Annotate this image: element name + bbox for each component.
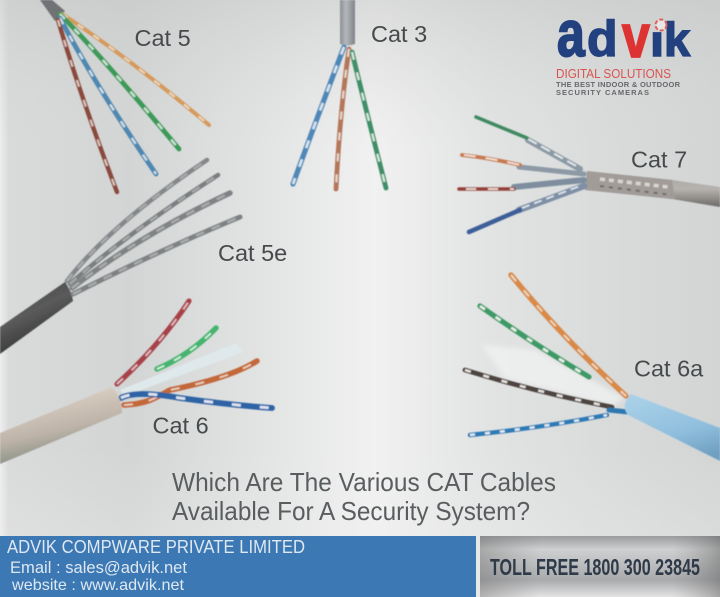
- Cat 3 green pair: [352, 52, 386, 188]
- label: Cat 6: Cat 6: [152, 412, 209, 438]
- cable: Cat 3: [293, 0, 386, 189]
- Cat 5 green pair: [60, 14, 179, 149]
- label: Cat 7: Cat 7: [631, 146, 687, 172]
- company name: ADVIK COMPWARE PRIVATE LIMITED: [7, 537, 305, 557]
- Cat 5e wire 3: [72, 193, 230, 288]
- panel: toll free: [480, 536, 720, 597]
- Cat 6a orange pair: [511, 275, 626, 396]
- Cat 3 orange pair: [336, 49, 349, 189]
- Cat 7 green pair: [476, 117, 580, 169]
- cable: Cat 5e: [0, 160, 240, 354]
- Cat 5e jacket: [0, 282, 73, 354]
- Cat 6 orange pair: [124, 361, 257, 405]
- title line 1: Which Are The Various CAT Cables: [172, 467, 556, 497]
- Cat 5 blue pair: [60, 18, 156, 174]
- logo wordmark: a: [557, 0, 585, 71]
- email: Email : sales@advik.net: [10, 558, 187, 577]
- logo wordmark: k: [664, 13, 691, 66]
- logo wordmark: [557, 0, 691, 71]
- Cat 6a green pair: [480, 306, 589, 377]
- Cat 6 green pair: [157, 328, 216, 369]
- Cat 5e wire 4: [73, 217, 240, 294]
- Cat 3 blue pair: [293, 47, 344, 184]
- label: Cat 5: Cat 5: [134, 25, 191, 51]
- logo tagline: THE BEST INDOOR & OUTDOOR: [556, 80, 681, 89]
- label: Cat 3: Cat 3: [371, 21, 427, 47]
- Cat 5e wire 2: [70, 175, 218, 284]
- Cat 6 separator film: [120, 343, 244, 396]
- cable: Cat 5: [40, 0, 209, 192]
- Cat 7 orange pair: [462, 155, 584, 174]
- Cat 6 jacket: [0, 387, 122, 464]
- cable: Cat 6a: [465, 275, 720, 461]
- Cat 6 blue pair: [121, 394, 272, 408]
- logo star mark: [656, 20, 666, 30]
- Cat 7 braid shield: [585, 171, 675, 199]
- cable: Cat 7: [459, 117, 720, 232]
- Cat 6a separator film: [482, 345, 625, 406]
- Cat 5 jacket: [40, 0, 65, 21]
- website: website : www.advik.net: [11, 577, 185, 594]
- Cat 7 jacket: [585, 171, 720, 207]
- cable: Cat 6: [0, 301, 272, 464]
- logo tagline second line: SECURITY CAMERAS: [556, 88, 649, 97]
- Cat 3 jacket: [340, 0, 355, 46]
- Cat 6a jacket: [625, 394, 720, 461]
- Cat 6a brown pair: [465, 370, 612, 407]
- logo wordmark: ı: [650, 17, 664, 66]
- label: Cat 6a: Cat 6a: [634, 356, 704, 382]
- label: Cat 5e: Cat 5e: [218, 240, 287, 266]
- Cat 6 red pair: [117, 301, 189, 384]
- Cat 5e wire 1: [67, 160, 207, 281]
- Cat 5 brown pair: [58, 20, 117, 192]
- logo wordmark: v: [622, 3, 650, 70]
- Cat 7 blue pair: [469, 186, 584, 232]
- logo wordmark: d: [587, 11, 618, 67]
- logo company line: DIGITAL SOLUTIONS: [556, 67, 671, 81]
- logo: advik: [556, 0, 691, 97]
- Cat 6a blue pair: [470, 410, 628, 435]
- title: [172, 467, 556, 526]
- title line 2: Available For A Security System?: [172, 496, 530, 526]
- panel: contact details: [0, 536, 476, 597]
- Cat 7 red pair: [459, 180, 584, 189]
- Cat 5 orange pair: [62, 14, 209, 125]
